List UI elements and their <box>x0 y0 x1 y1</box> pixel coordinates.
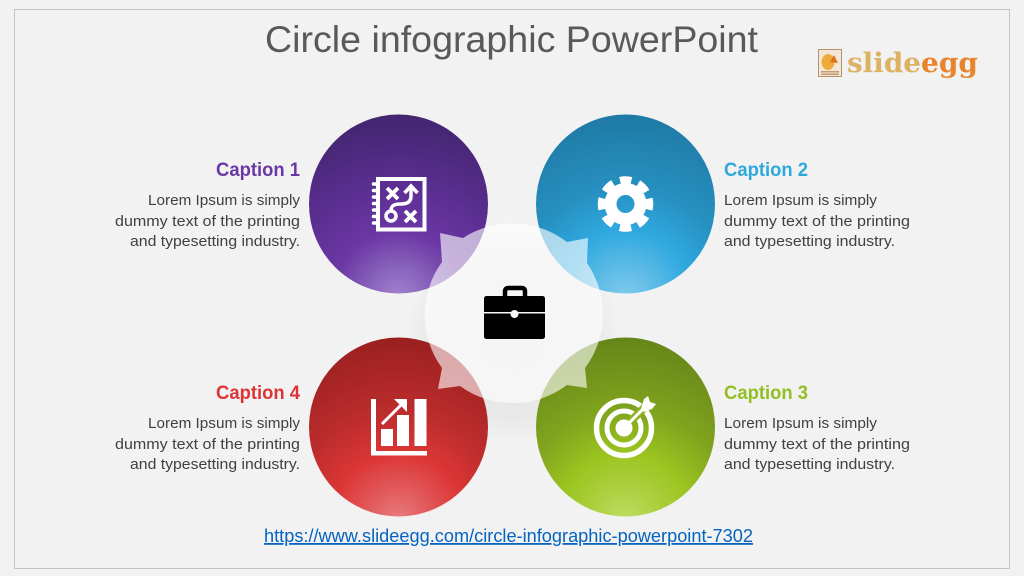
icon: bar chart with arrow <box>371 399 427 456</box>
icon: strategy plan <box>374 179 424 230</box>
panel: caption 2 text: dummy text of the printing <box>724 213 910 230</box>
icon: briefcase <box>484 288 545 339</box>
panel: caption 3 text: dummy text of the printing <box>724 436 910 453</box>
link: https://www.slideegg.com/circle-infographic-powerpoint-7302 <box>264 526 753 546</box>
icon: gear <box>602 180 650 228</box>
green circle <box>536 338 715 516</box>
panel: caption 2 text: and typesetting industry. <box>724 233 895 250</box>
center shadow <box>405 228 621 444</box>
panel: caption 3 text <box>724 383 910 473</box>
panel: caption 4 text: and typesetting industry. <box>130 456 300 473</box>
panel: caption 3 text: Lorem Ipsum is simply <box>724 415 878 432</box>
logo: slideegg <box>818 48 978 79</box>
panel: caption 1 text: dummy text of the printing <box>115 213 300 230</box>
red circle <box>309 338 488 516</box>
panel: caption 1 text: Caption 1 <box>216 160 300 181</box>
panel: caption 4 text <box>115 383 301 473</box>
purple circle <box>309 114 488 294</box>
icon: target with arrow <box>596 396 656 456</box>
panel: caption 4 text: dummy text of the printing <box>115 436 300 453</box>
panel: caption 2 text: Caption 2 <box>724 160 808 181</box>
panel: caption 4 text: Caption 4 <box>216 383 300 404</box>
panel: caption 3 text: and typesetting industry. <box>724 456 895 473</box>
title: Circle infographic PowerPoint <box>265 19 759 60</box>
panel: caption 2 text: Lorem Ipsum is simply <box>724 192 878 209</box>
panel: caption 1 text: Lorem Ipsum is simply <box>148 192 301 209</box>
panel: caption 2 text <box>724 160 910 250</box>
blue circle <box>536 114 715 294</box>
panel: caption 1 text: and typesetting industry. <box>130 233 300 250</box>
panel: caption 4 text: Lorem Ipsum is simply <box>148 415 301 432</box>
panel: caption 1 text <box>115 160 301 250</box>
center translucent spiked circle <box>425 223 603 403</box>
panel: caption 3 text: Caption 3 <box>724 383 808 404</box>
logo: slideegg: egg <box>921 48 978 79</box>
logo: slideegg: slide <box>847 48 921 79</box>
